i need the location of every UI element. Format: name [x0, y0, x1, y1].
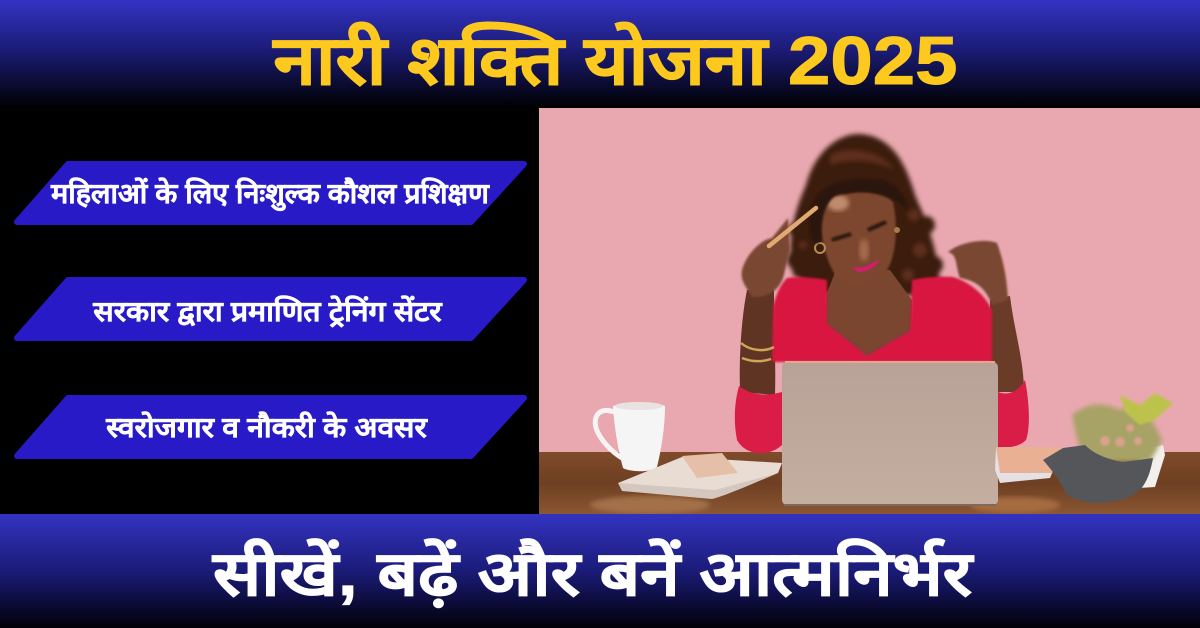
hair front	[809, 179, 908, 243]
right forearm	[990, 296, 1024, 392]
left sleeve	[735, 386, 782, 453]
curly hair mass	[787, 134, 943, 296]
plant pot	[1043, 393, 1173, 503]
pencil	[769, 208, 816, 246]
laptop	[782, 362, 998, 505]
red top	[772, 277, 992, 362]
right hand	[948, 241, 1008, 305]
feature banner: free skill training	[17, 164, 524, 222]
bottom band	[0, 514, 1200, 628]
feature banner: self employment and jobs	[17, 398, 524, 456]
left forearm	[740, 290, 775, 395]
notebook	[995, 447, 1063, 483]
feature banner: certified training centres	[17, 280, 524, 338]
neck and chest	[825, 270, 912, 358]
bracelets	[741, 343, 774, 361]
feature banner: certified training centres: सरकार द्वारा प्रमाणित ट्रेनिंग सेंटर	[92, 295, 443, 328]
feature banner: self employment and jobs: स्वरोजगार व नौकरी के अवसर	[105, 411, 428, 444]
coffee mug	[595, 402, 665, 471]
phone	[682, 453, 738, 478]
dark neckline trim	[827, 323, 910, 355]
top header band	[0, 0, 1200, 108]
bottom slogan: सीखें, बढ़ें और बनें आत्मनिर्भर	[211, 538, 975, 609]
right sleeve	[998, 380, 1029, 447]
woman	[735, 134, 1029, 453]
tablet	[618, 457, 782, 499]
title: नारी शक्ति योजना 2025	[271, 22, 957, 99]
left hand	[742, 218, 790, 297]
face	[821, 192, 896, 284]
feature banner: free skill training: महिलाओं के लिए निःशुल्क कौशल प्रशिक्षण	[50, 177, 490, 212]
photo panel: woman at laptop	[539, 108, 1200, 514]
